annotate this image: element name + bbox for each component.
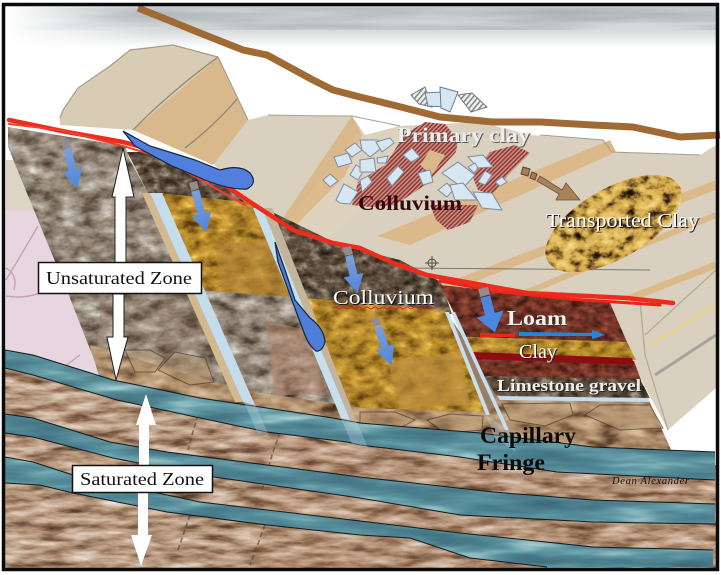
layer: clay red line: [472, 352, 634, 365]
label: Unsaturated Zone: [38, 262, 202, 294]
brown ground line: [138, 8, 720, 137]
panel: geological map background: [60, 45, 716, 430]
arrow: infiltration 3: [337, 245, 367, 295]
tiles: broken rock fragments: [323, 138, 507, 210]
label: Loam: Loam: [507, 306, 568, 330]
label: Capillary: Capillary: [480, 423, 577, 448]
label: Saturated Zone: [72, 466, 212, 492]
label: Primary clay: Primary clay: [397, 123, 531, 147]
rock underlayer: [5, 360, 717, 568]
crosshair icon: [425, 256, 439, 270]
arrow: lateral flow: [519, 330, 605, 339]
arrow: saturated zone: [131, 394, 156, 566]
panel: pink map fragment: [6, 160, 100, 375]
blue water pool: [123, 131, 253, 189]
sky band: [6, 6, 716, 50]
wedge: dark soil middle: [274, 212, 452, 314]
arrow: infiltration into loam: [469, 284, 508, 336]
label: Colluvium on rock: Colluvium: [333, 287, 435, 309]
water band 3: [5, 453, 717, 568]
wedge: gold colluvium: [162, 193, 290, 297]
layer: loam: [440, 285, 627, 342]
clay ellipse: transported clay: [545, 174, 682, 272]
base rock under all wedges: [100, 193, 672, 452]
label: Clay: Clay: [519, 341, 557, 363]
label: Saturated Zone: Saturated Zone: [80, 469, 204, 489]
stones: foreground boulders: [125, 350, 663, 433]
label: signature: Dean Alexander: [611, 476, 690, 487]
blue water seep: [275, 242, 325, 351]
layer: tan stones: [90, 340, 675, 455]
hatched clay regions: [352, 122, 530, 230]
arrow: infiltration 1: [55, 138, 87, 191]
arrow: unsaturated zone: [107, 148, 134, 380]
label: Limestone gravel: Limestone gravel: [497, 376, 641, 395]
water band 1: capillary fringe: [5, 345, 717, 485]
label: Fringe: Fringe: [477, 450, 545, 475]
red slope line: [9, 120, 673, 305]
water band 2: [5, 410, 717, 528]
arrow: infiltration 4: [366, 315, 401, 369]
label: Unsaturated Zone: Unsaturated Zone: [46, 268, 192, 288]
translucent fault continuation through water: [243, 400, 516, 452]
layer: lower loam: [476, 359, 641, 380]
fault strips: [142, 193, 509, 430]
tiles: floating fragments above slope: [411, 87, 487, 112]
wedge: lower stone: [204, 290, 335, 404]
arrow: transported clay brown arrow: [521, 167, 580, 200]
label: Transported Clay: Transported Clay: [546, 210, 699, 232]
layer: clay band: [466, 337, 636, 360]
label: Colluvium on map: Colluvium: [358, 191, 463, 215]
wedge: dark soil top: [127, 152, 246, 202]
perched clay red segment: [480, 333, 515, 337]
arrow: infiltration 2: [183, 179, 216, 235]
wedge: grey stone: [8, 127, 228, 386]
layer: gravel: [484, 376, 650, 398]
wedge: gold lower: [308, 298, 485, 412]
band outlines: [5, 350, 715, 567]
layer: pale strip under gravel: [497, 396, 650, 402]
